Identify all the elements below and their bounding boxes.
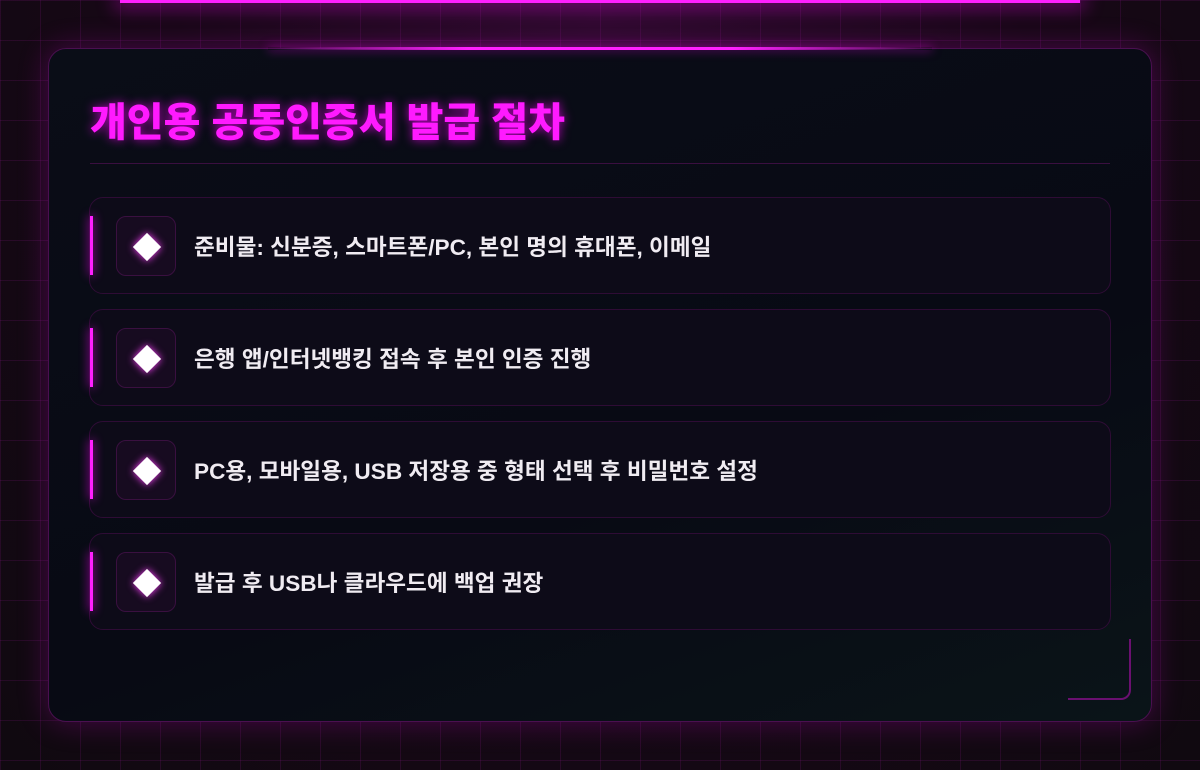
text: step 4: 발급 후 USB나 클라우드에 백업 권장 <box>194 571 543 596</box>
title: 개인용 공동인증서 발급 절차 <box>90 101 565 145</box>
text: step 3: PC용, 모바일용, USB 저장용 중 형태 선택 후 비밀번호 설정 <box>194 459 758 484</box>
icon: diamond <box>116 552 176 612</box>
step 4 <box>89 533 1111 630</box>
icon: diamond <box>116 216 176 276</box>
corner accent <box>1068 639 1131 700</box>
step 3 <box>89 421 1111 518</box>
step 2 <box>89 309 1111 406</box>
text: step 1: 준비물: 신분증, 스마트폰/PC, 본인 명의 휴대폰, 이메일 <box>194 235 711 260</box>
icon: diamond <box>116 328 176 388</box>
text: step 2: 은행 앱/인터넷뱅킹 접속 후 본인 인증 진행 <box>194 347 591 372</box>
icon: diamond <box>116 440 176 500</box>
step 1 <box>89 197 1111 294</box>
